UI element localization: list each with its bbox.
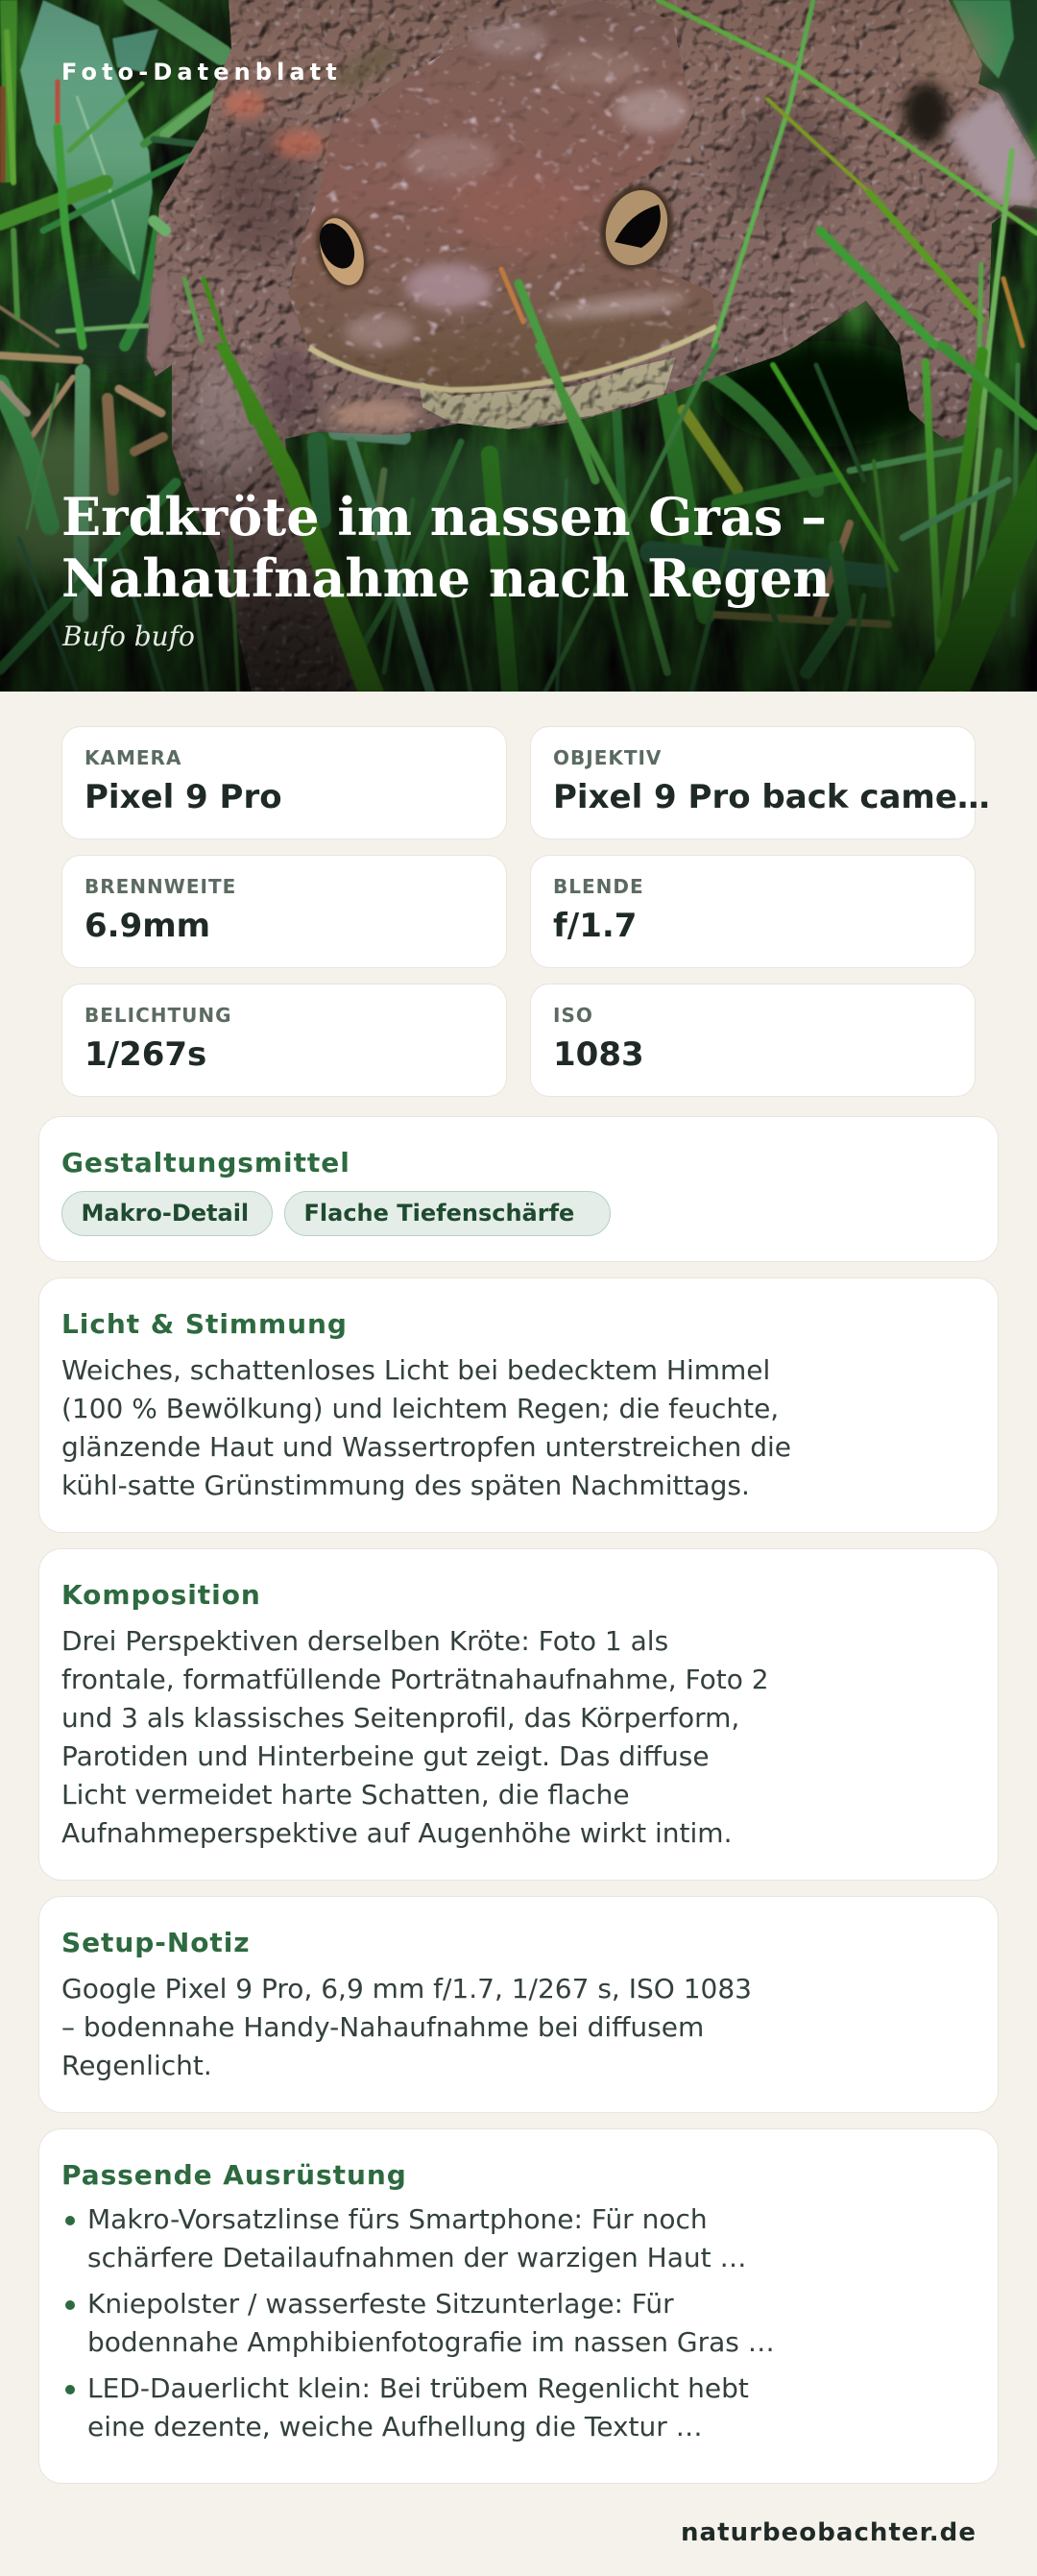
panel: Gestaltungsmittel: Gestaltungsmittel bbox=[61, 1147, 350, 1179]
spec card: Kamera bbox=[61, 726, 507, 839]
heading: Passende Ausrüstung bbox=[61, 2159, 407, 2191]
chip: Flache Tiefenschärfe: Flache Tiefenschärfe bbox=[303, 1200, 574, 1227]
list item 3: eine dezente, weiche Aufhellung die Textur … bbox=[87, 2411, 703, 2442]
spec card: Kamera: KAMERA bbox=[84, 746, 181, 769]
eyebrow label: Foto-Datenblatt bbox=[61, 59, 342, 85]
toad head bbox=[288, 0, 716, 429]
panel: Gestaltungsmittel bbox=[38, 1116, 999, 1262]
heading: Licht & Stimmung bbox=[61, 1308, 348, 1340]
list item 2 bbox=[65, 2288, 775, 2358]
left eye bbox=[307, 208, 376, 295]
background grass blades and dry stalks bbox=[0, 0, 1018, 692]
right eye bbox=[589, 175, 685, 280]
heading: Setup-Notiz bbox=[61, 1927, 251, 1958]
spec card: Kamera: Pixel 9 Pro bbox=[84, 778, 282, 816]
spec card: Blende bbox=[530, 855, 976, 968]
body text: und 3 als klassisches Seitenprofil, das Körperform, bbox=[61, 1702, 739, 1734]
spec card: Belichtung: BELICHTUNG bbox=[84, 1004, 232, 1027]
spec card: ISO: 1083 bbox=[553, 1035, 644, 1074]
toad body bbox=[147, 0, 1037, 692]
spec card: Belichtung bbox=[61, 984, 507, 1097]
spec card: Brennweite: BRENNWEITE bbox=[84, 875, 236, 898]
panel: Komposition bbox=[38, 1548, 999, 1881]
spec card: ISO: ISO bbox=[553, 1004, 593, 1027]
spec card: Belichtung: 1/267s bbox=[84, 1035, 206, 1074]
list item 2: bodennahe Amphibienfotografie im nassen Gras … bbox=[87, 2326, 775, 2358]
panel: Setup-Notiz bbox=[38, 1896, 999, 2113]
footer brand: naturbeobachter.de bbox=[681, 2518, 977, 2547]
photo illustration: toad in wet grass bbox=[0, 0, 1037, 692]
body text: Google Pixel 9 Pro, 6,9 mm f/1.7, 1/267 s, ISO 1083 bbox=[61, 1973, 752, 2005]
spec card: Brennweite bbox=[61, 855, 507, 968]
body text: Weiches, schattenloses Licht bei bedecktem Himmel bbox=[61, 1354, 770, 1386]
wet highlights bbox=[326, 21, 689, 386]
body text bbox=[61, 1625, 769, 1849]
list item 1 bbox=[65, 2203, 747, 2273]
spec card: ISO bbox=[530, 984, 976, 1097]
spec card: Objektiv: Pixel 9 Pro back came… bbox=[553, 778, 990, 816]
list item 1: schärfere Detailaufnahmen der warzigen Haut … bbox=[87, 2242, 747, 2273]
spec card: Blende: BLENDE bbox=[553, 875, 644, 898]
body text: Regenlicht. bbox=[61, 2050, 212, 2081]
dark warts cluster and colored patches bbox=[147, 10, 1037, 692]
panel: Licht & Stimmung bbox=[38, 1277, 999, 1533]
lip and throat bbox=[309, 327, 716, 429]
body text: Aufnahmeperspektive auf Augenhöhe wirkt intim. bbox=[61, 1817, 732, 1849]
main title bbox=[61, 486, 831, 609]
body text: Drei Perspektiven derselben Kröte: Foto 1 als bbox=[61, 1625, 668, 1657]
hero photo panel bbox=[0, 0, 1037, 692]
spec card: Blende: f/1.7 bbox=[553, 907, 637, 945]
broad leaf bbox=[0, 0, 1014, 281]
body text: Parotiden und Hinterbeine gut zeigt. Das diffuse bbox=[61, 1740, 710, 1772]
body text bbox=[61, 1354, 791, 1501]
list item 1: Makro-Vorsatzlinse fürs Smartphone: Für noch bbox=[87, 2203, 708, 2235]
body text: – bodennahe Handy-Nahaufnahme bei diffusem bbox=[61, 2011, 704, 2043]
spec card: Objektiv bbox=[530, 726, 976, 839]
body text bbox=[61, 1973, 752, 2081]
chip: Makro-Detail bbox=[61, 1191, 273, 1236]
body text: kühl-satte Grünstimmung des späten Nachmittags. bbox=[61, 1470, 750, 1501]
spec card: Brennweite: 6.9mm bbox=[84, 907, 210, 945]
latin species name: Bufo bufo bbox=[62, 620, 195, 652]
tapered blades bbox=[215, 344, 1037, 692]
chip: Makro-Detail: Makro-Detail bbox=[81, 1200, 249, 1227]
meadow background bbox=[0, 0, 1037, 692]
main title: Erdkröte im nassen Gras – bbox=[61, 486, 827, 547]
spec card: Objektiv: OBJEKTIV bbox=[553, 746, 662, 769]
body text: frontale, formatfüllende Porträtnahaufnahme, Foto 2 bbox=[61, 1664, 769, 1695]
chip: Flache Tiefenschärfe bbox=[284, 1191, 611, 1236]
list item 2: Kniepolster / wasserfeste Sitzunterlage: Für bbox=[87, 2288, 674, 2320]
main title: Nahaufnahme nach Regen bbox=[61, 547, 831, 609]
dark photo gradient bbox=[0, 0, 1037, 692]
heading: Komposition bbox=[61, 1579, 261, 1611]
body text: glänzende Haut und Wassertropfen unterstreichen die bbox=[61, 1431, 791, 1463]
panel: Passende Ausrüstung bbox=[38, 2128, 999, 2484]
foreground grass blades bbox=[0, 0, 1037, 692]
list item 3: LED-Dauerlicht klein: Bei trübem Regenlicht hebt bbox=[87, 2372, 749, 2404]
list item 3 bbox=[65, 2372, 749, 2442]
body text: Licht vermeidet harte Schatten, die flache bbox=[61, 1779, 630, 1810]
body text: (100 % Bewölkung) und leichtem Regen; die feuchte, bbox=[61, 1393, 779, 1424]
